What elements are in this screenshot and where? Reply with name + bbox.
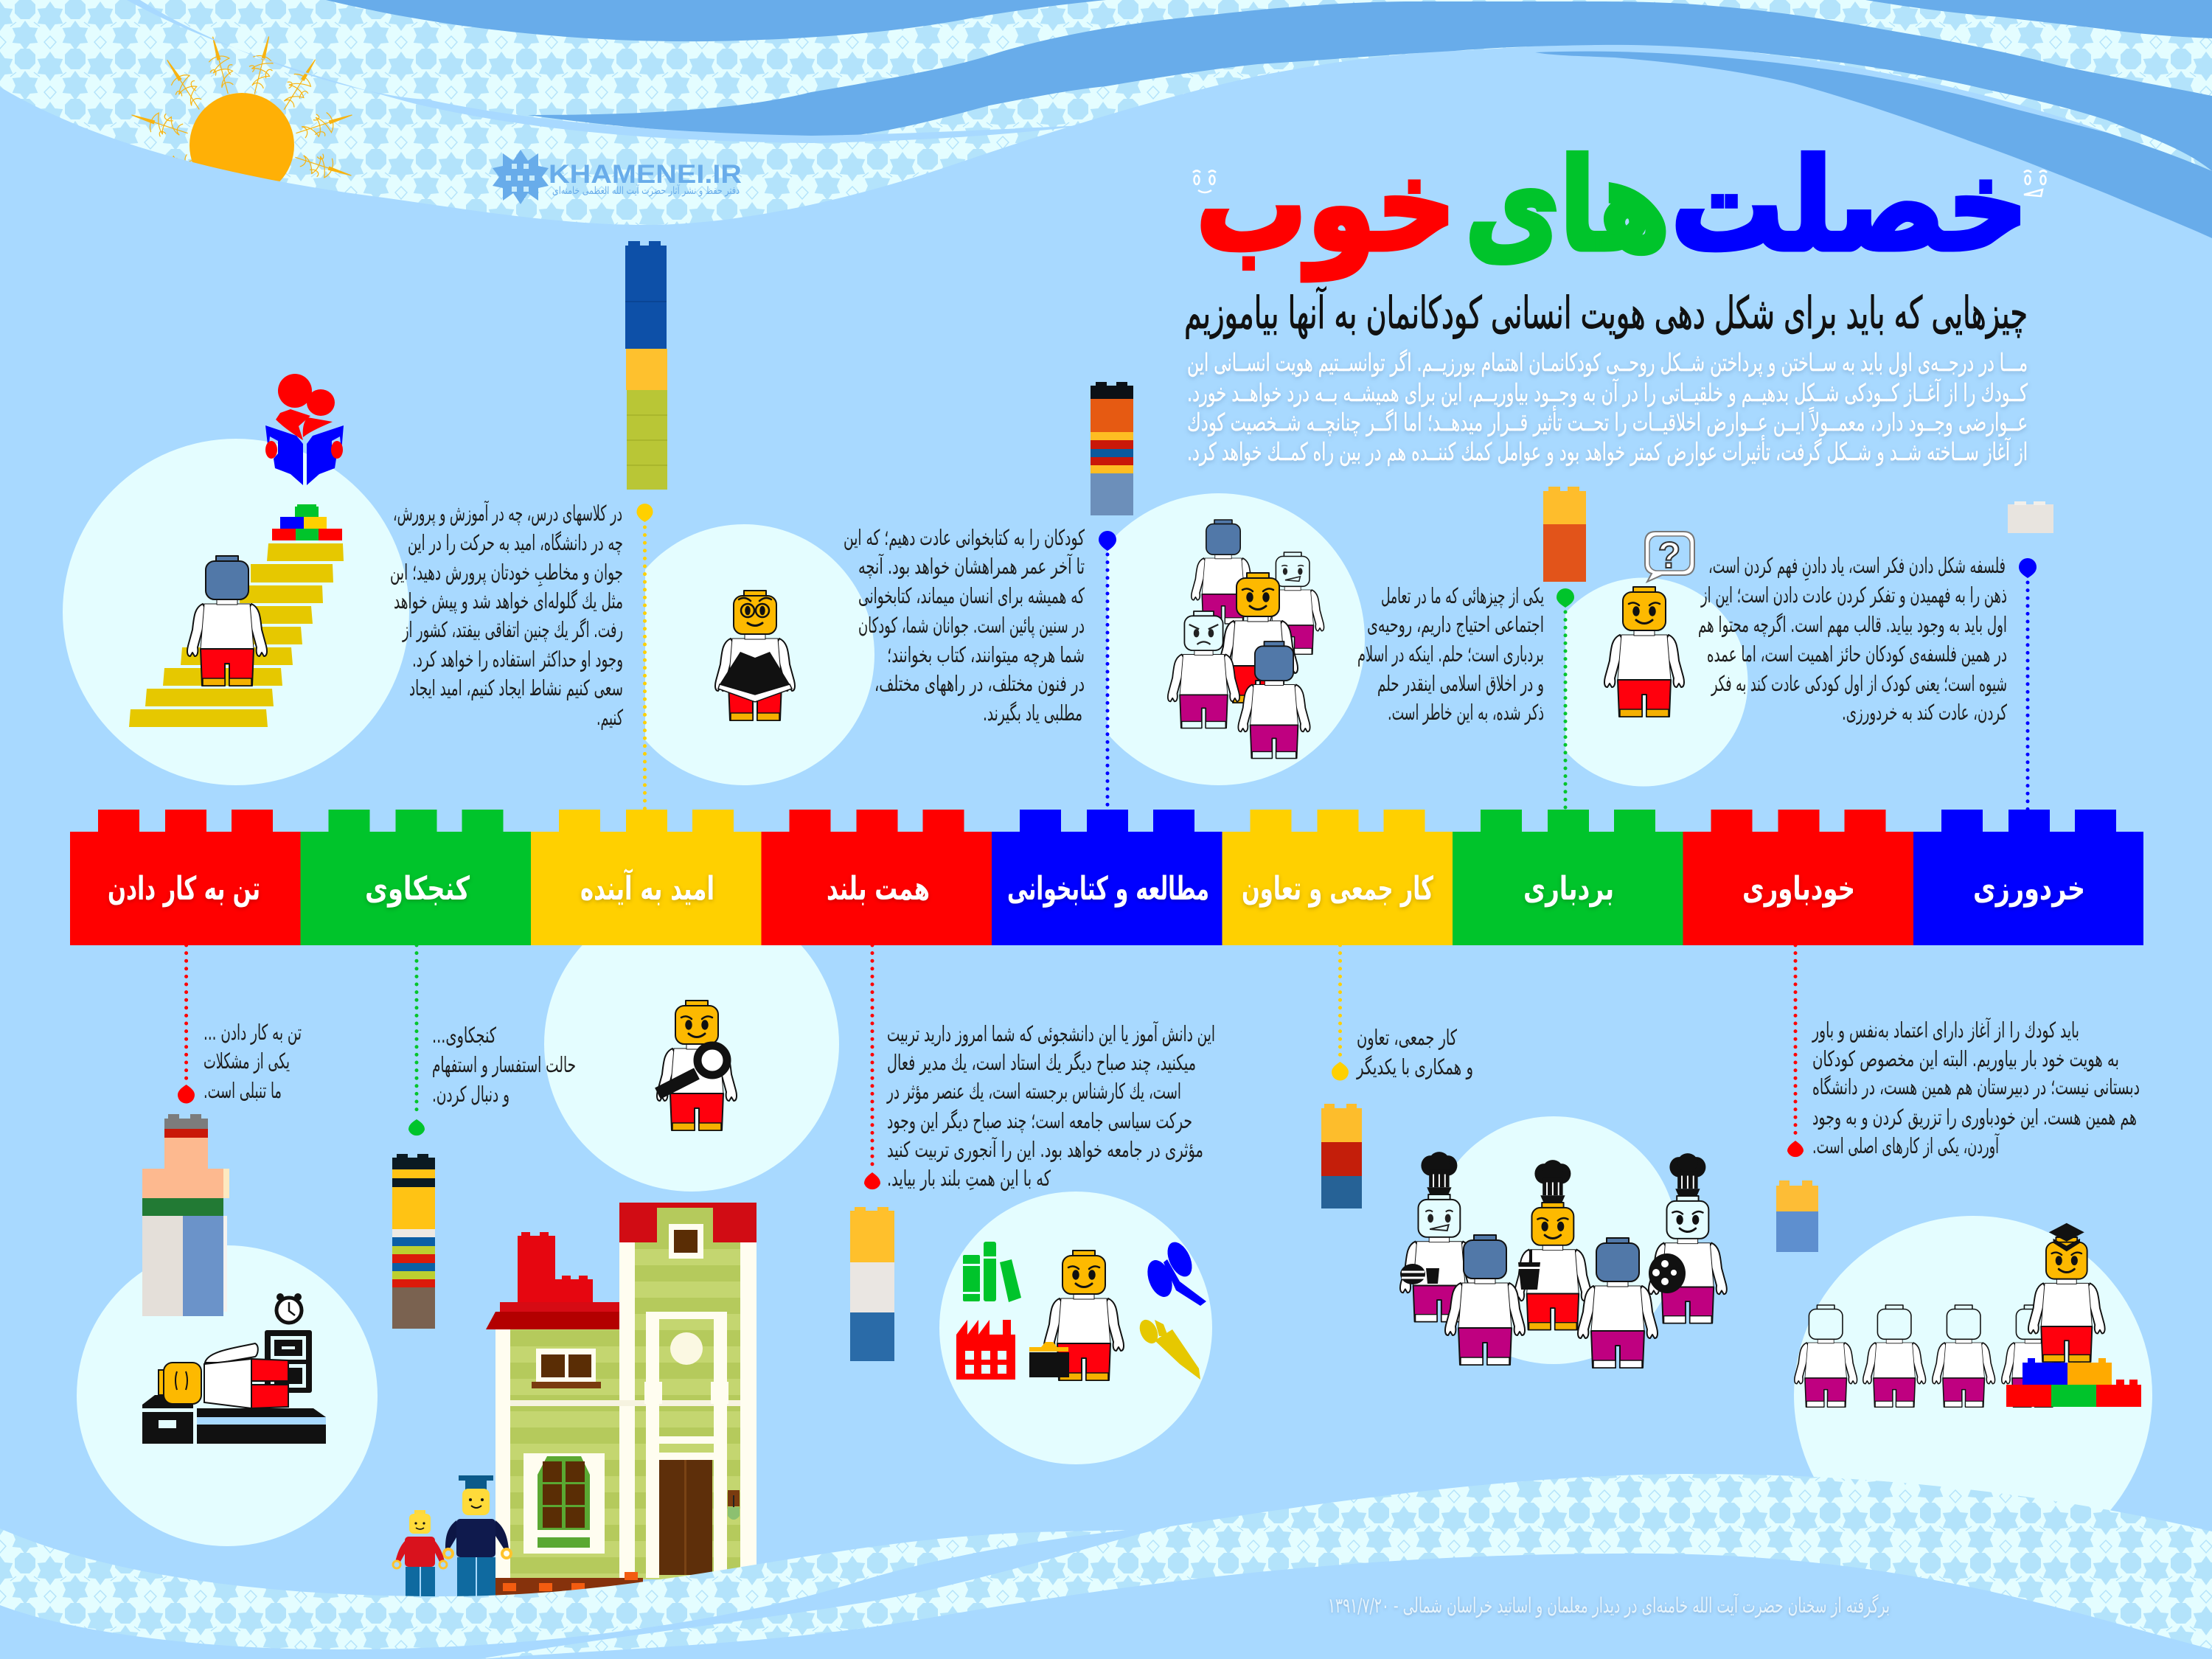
cabinet <box>265 1330 312 1393</box>
brick labels <box>108 868 2085 908</box>
text block: motaleeh: در فنون مختلف، در راههای مختلف، <box>874 671 1085 696</box>
text block: omid: جوان و مخاطبِ خودتان پرورش دهید؛ این <box>390 560 623 587</box>
text block: konjkavi: حالت استفسار و استفهام <box>432 1052 576 1077</box>
cup <box>1518 1250 1540 1290</box>
sky background wave <box>0 43 2212 310</box>
text block: omid: چه در دانشگاه، امید به حرکت را در این <box>408 530 623 555</box>
pen <box>1136 1317 1200 1380</box>
chef middle <box>1514 1160 1592 1329</box>
text block: tan be kar: یکی از مشکلات <box>204 1048 290 1074</box>
gavel <box>1143 1238 1206 1306</box>
panel circles <box>63 439 2152 1574</box>
text block: bordbari: و در اخلاق اسلامی اینقدر حلم <box>1377 671 1544 697</box>
ground planter <box>495 1578 643 1600</box>
text block: konjkavi: و دنبال کردن. <box>432 1082 509 1107</box>
text block: tan be kar <box>204 1020 302 1103</box>
chef left <box>1400 1152 1478 1321</box>
brick: bordbari <box>1453 810 1683 945</box>
logo: khamenei.ir <box>493 150 742 204</box>
door frame <box>644 1312 728 1578</box>
icon: chefs group <box>1400 1152 1727 1368</box>
figure: parent <box>444 1475 511 1597</box>
illustration: lego house <box>486 1203 757 1600</box>
text block: kheradvarzi: اول باید به وجود بیاید. قالب مهم است. اگرچه محتوا هم <box>1698 612 2007 638</box>
bed <box>142 1395 326 1444</box>
text block: khodbavari: آوردن، یکی از کارهای اصلی است. <box>1812 1133 2000 1158</box>
icon: graduate on bricks <box>1795 1223 2141 1407</box>
brick labels: خردورزی <box>1973 870 2085 908</box>
brick labels: مطالعه و کتابخوانی <box>1007 870 1209 908</box>
text block: bordbari: ذکر شده، به این خاطر است. <box>1388 700 1544 725</box>
tower roof <box>619 1203 757 1259</box>
text block: bordbari: بردباری است؛ حلم. اینکه در اسلام <box>1357 641 1544 667</box>
lantern <box>728 1490 740 1520</box>
roof <box>486 1302 619 1329</box>
source note: برگرفته از سخنان حضرت آیت الله خامنه‌ای در دیدار معلمان و اساتید خراسان شمالی - ۱۳۹۱/۷/۲۰ <box>1328 1593 1890 1618</box>
brick: tan be kar dadan <box>70 810 301 945</box>
logo: khamenei.ir: دفتر حفظ و نشر آثار حضرت آیت الله العظمی خامنه‌ای <box>552 184 740 197</box>
lying figure <box>159 1343 288 1408</box>
title: خوب <box>1196 131 1456 280</box>
brick tower: bordbari <box>1543 487 1586 582</box>
pale figure <box>1262 552 1324 654</box>
text block: hemmat: حرکت سیاسی جامعه است؛ چند صباح دیگر این وجود <box>887 1108 1192 1133</box>
text block: hemmat: این دانش آموز یا این دانشجوئی که شما امروز دارید تربیت <box>887 1020 1215 1046</box>
text block: kheradvarzi: در همین فلسفه‌ی کودکان حائز اهمیت است، اما عمده <box>1707 641 2007 667</box>
icon: sun <box>128 34 355 198</box>
brick: white <box>2008 501 2053 533</box>
pizza <box>1649 1253 1686 1293</box>
oval window <box>670 1332 703 1365</box>
text block: kar jamei: کار جمعی، تعاون <box>1357 1025 1457 1050</box>
text block: omid: سعی کنیم نشاط ایجاد کنیم، امید ایجاد <box>409 675 623 701</box>
icon: reader figure <box>715 591 795 720</box>
text block: omid: مثل یك گلوله‌ای خواهد شد و پیش خواهد <box>394 588 623 614</box>
text block: omid: وجود او حداکثر استفاده را خواهد کرد. <box>412 647 623 672</box>
top patterned band <box>0 0 2212 243</box>
brick tower: konjkavi <box>392 1154 435 1329</box>
window <box>532 1349 601 1388</box>
text block: tan be kar: تن به کار دادن ... <box>204 1020 302 1045</box>
text block: hemmat: که با این همتِ بلند بار بیاید. <box>887 1166 1051 1191</box>
text block: kheradvarzi: کردن، عادت کند به خردورزی. <box>1842 700 2007 725</box>
books <box>963 1242 1021 1302</box>
angry figure <box>1168 611 1239 728</box>
title <box>1196 131 2028 280</box>
text block: hemmat: مؤثری در جامعه خواهد بود. این را آنجوری تربیت کنید <box>887 1136 1203 1162</box>
text block: motaleeh <box>844 525 1085 726</box>
brick labels: کنجکاوی <box>365 870 470 908</box>
icon: stairs with figure <box>129 504 344 727</box>
figure: child <box>393 1510 447 1597</box>
chimney <box>518 1232 593 1303</box>
big window <box>524 1453 605 1554</box>
icon: book with people <box>265 374 344 485</box>
icon: magnifier figure <box>657 1001 737 1130</box>
text block: omid <box>390 500 623 731</box>
text block: motaleeh: شما هرچه میتوانند، کتاب بخوانند؛ <box>887 642 1085 667</box>
text block: hemmat <box>886 1020 1215 1191</box>
text block: hemmat: است، یك کارشناس برجسته است، یك عنصر مؤثر در <box>886 1079 1181 1104</box>
text block: bordbari: اجتماعی احتیاج داریم، روحیه‌ی <box>1367 612 1544 638</box>
brick: khodbavari <box>1683 810 1914 945</box>
brick tower: kar jamei <box>1321 1104 1362 1208</box>
briefcase <box>1029 1342 1069 1377</box>
brick: kar jamei <box>1222 810 1453 945</box>
brick labels: خودباوری <box>1742 870 1855 908</box>
text block: konjkavi: کنجکاوی... <box>432 1023 496 1048</box>
text block: kar jamei: و همکاری با یکدیگر <box>1356 1054 1473 1079</box>
brick timeline <box>70 810 2143 945</box>
text block: kheradvarzi: فلسفه شکل دادن فکر است، یاد دادنِ فهم کردن است، <box>1708 553 2006 580</box>
text block: khodbavari <box>1812 1017 2140 1158</box>
factory <box>956 1320 1015 1380</box>
bottom patterned wave left <box>0 1528 1128 1649</box>
graduate figure <box>2028 1223 2105 1362</box>
brick: motaleeh <box>992 810 1222 945</box>
text block: motaleeh: تا آخر عمر همراهشان خواهد بود. آنچه <box>858 553 1085 579</box>
text block: omid: کنیم. <box>597 705 623 731</box>
dark wave band <box>528 1 2212 171</box>
text block: tan be kar: ما تنبلی است. <box>204 1078 282 1103</box>
brick: hemmat boland <box>761 810 992 945</box>
bottom patterned wave right <box>479 1474 2212 1659</box>
text block: kar jamei <box>1356 1025 1473 1079</box>
text block: kheradvarzi: شیوه است؛ یعنی کودک از اول کودکی عادت کند به فکر <box>1711 671 2007 696</box>
text block: motaleeh: که همیشه برای انسان میماند، کتابخوانی <box>858 583 1085 608</box>
icon: sleeping figure <box>142 1293 326 1444</box>
icon: question figure <box>1604 532 1694 717</box>
intro paragraph <box>1187 348 2028 467</box>
brick pile <box>2006 1358 2141 1407</box>
pin heads <box>178 504 2037 1189</box>
brick labels: کار جمعی و تعاون <box>1242 870 1433 908</box>
brick tower: omid <box>625 241 667 490</box>
tower wall <box>619 1242 757 1579</box>
text block: omid: رفت. اگر یك چنین اتفاقی بیفتد، کشور از <box>402 617 623 642</box>
chef right <box>1649 1153 1727 1323</box>
brick labels: تن به کار دادن <box>108 870 260 908</box>
title faces <box>1193 171 2047 196</box>
speech bubble <box>1645 532 1694 582</box>
dotted connector lines <box>187 527 2028 1169</box>
brick tower: tan be kar <box>142 1114 229 1316</box>
text block: motaleeh: در سنین پائین است. جوانان شما، کودکان <box>858 613 1085 639</box>
brick: omid be ayandeh <box>531 810 762 945</box>
text block: konjkavi <box>432 1023 576 1107</box>
text block: kheradvarzi: ذهن را به فهمیدن و تفکر کردن عادت دادن است؛ این از <box>1700 582 2007 608</box>
light stripe <box>127 0 1084 143</box>
text block: bordbari <box>1357 583 1544 725</box>
brick tower: hemmat <box>850 1207 894 1361</box>
brick tower: motaleeh <box>1091 382 1133 515</box>
text block: motaleeh: مطلبی یاد بگیرند. <box>983 700 1082 726</box>
text block: bordbari: یکی از چیزهائی که ما در تعامل <box>1381 583 1544 608</box>
text block: kheradvarzi <box>1698 553 2007 725</box>
icon: group of figures <box>1168 520 1324 758</box>
brick: kheradvarzi <box>1913 810 2143 945</box>
speech bubble: ? <box>1658 535 1680 576</box>
brick labels: بردباری <box>1523 870 1614 908</box>
stairs <box>129 543 344 727</box>
dark top wave right <box>1865 0 2212 38</box>
icon: worker figure with tools <box>956 1238 1206 1380</box>
burger <box>1400 1264 1439 1284</box>
door <box>659 1460 712 1575</box>
brick labels: همت بلند <box>827 870 930 908</box>
lego pile <box>272 504 342 540</box>
back figure <box>187 556 267 686</box>
text block: hemmat: میکنید، چند صباح دیگر یك استاد است، یك مدیر فعال <box>887 1050 1196 1075</box>
brick: konjkavi <box>301 810 531 945</box>
dark wave right <box>1535 52 2212 238</box>
brick labels: امید به آینده <box>580 868 714 908</box>
text block: omid: در کلاسهای درس، چه در آموزش و پرورش، <box>393 500 622 526</box>
text block: motaleeh: کودکان را به کتابخوانی عادت دهیم؛ که این <box>844 525 1085 551</box>
dark top wave left <box>326 0 1106 41</box>
brick tower: khodbavari <box>1776 1180 1818 1252</box>
clock <box>276 1293 302 1323</box>
title: های <box>1465 131 1670 279</box>
title: خصلت <box>1671 131 2028 279</box>
left wing wall <box>495 1327 621 1579</box>
logo: khamenei.ir: KHAMENEI.IR <box>549 160 742 189</box>
